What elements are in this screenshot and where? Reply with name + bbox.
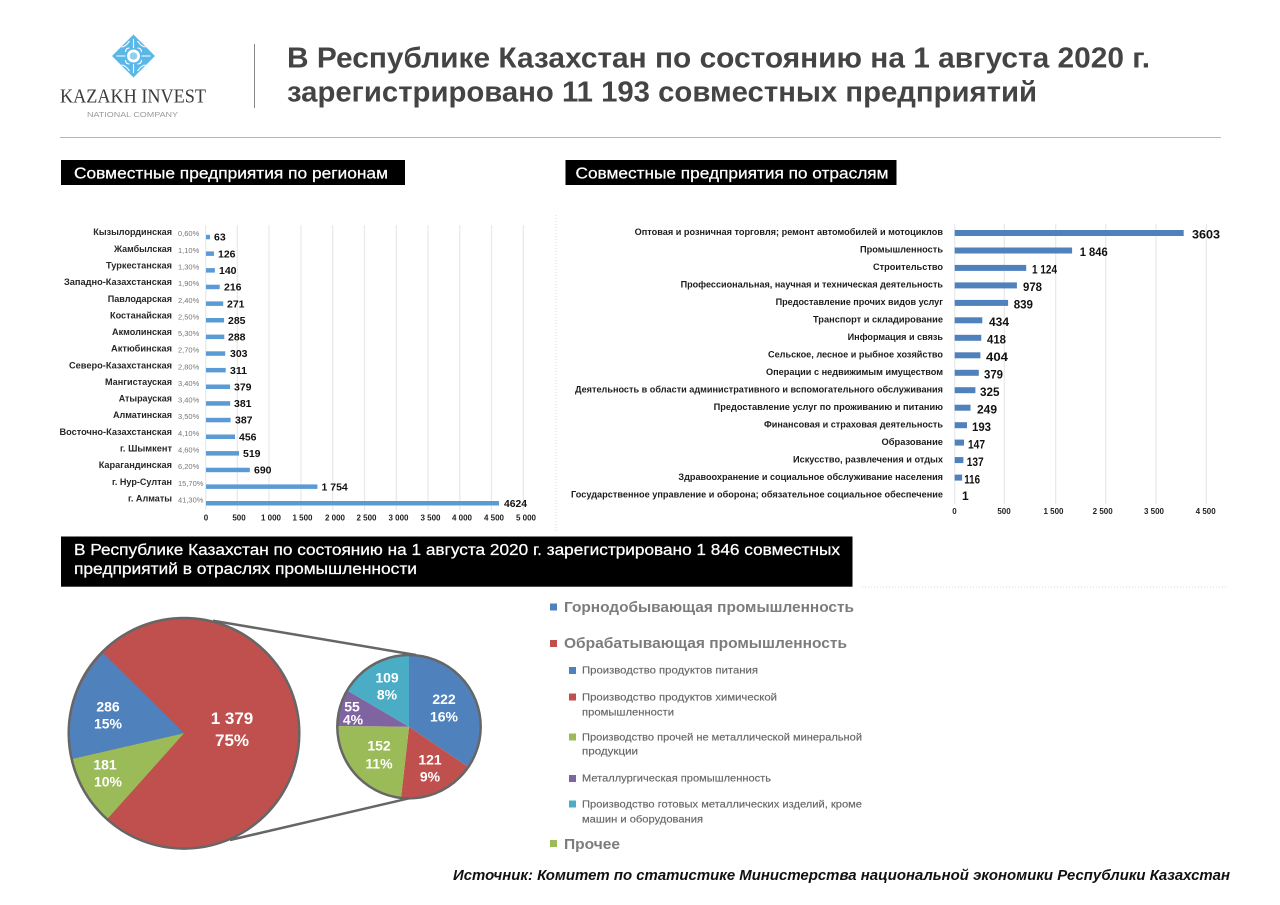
logo: Kazakh Invest (60, 34, 206, 119)
heading: industry joint ventures (61, 536, 852, 587)
bar chart: regions: Западно-Казахстанская (64, 277, 172, 288)
title: зарегистрировано 11 193 совместных предприятий (287, 77, 1037, 109)
bar chart: regions: 63 (214, 232, 226, 244)
bar chart: regions: 690 (254, 465, 272, 477)
bar chart: regions: 500 (232, 514, 246, 523)
bar chart: regions: 1 000 (261, 514, 282, 523)
legend: Производство прочей не металлической минеральной (582, 732, 862, 744)
bar chart: industries: Сельское, лесное и рыбное хозяйство (768, 349, 943, 360)
bar chart: industries: Информация и связь (848, 332, 943, 343)
bar chart: regions: 3,40% (178, 379, 200, 388)
bar chart: regions: 5 000 (516, 514, 537, 523)
bar chart: regions: Восточно-Казахстанская (60, 427, 172, 438)
pie chart: industry overall: 181 (93, 757, 117, 773)
bar chart: industries: 193 (972, 420, 991, 434)
bar chart: industries: 3 500 (1144, 507, 1165, 516)
legend (550, 599, 862, 853)
source note: Источник: Комитет по статистике Министерства национальной экономики Республики Казахстан (453, 867, 1230, 884)
bar chart: regions: 2,50% (178, 312, 200, 321)
bar chart: regions: 15,70% (178, 479, 204, 488)
pie chart: manufacturing breakdown: 152 (367, 738, 391, 754)
bar chart: industries: Здравоохранение и социальное обслуживание населения (678, 472, 943, 483)
bar chart: regions: 1,90% (178, 279, 200, 288)
heading: by industries: Совместные предприятия по отраслям (576, 166, 888, 183)
bar chart: industries: Операции с недвижимым имуществом (766, 367, 943, 378)
bar chart: regions: Туркестанская (106, 260, 172, 271)
bar chart: regions: 4,60% (178, 445, 200, 454)
bar chart: regions: 1,30% (178, 262, 200, 271)
bar chart: regions: 379 (234, 381, 252, 393)
bar chart: industries: 839 (1014, 298, 1033, 312)
bar chart: industries: 0 (952, 507, 957, 516)
bar chart: industries: 404 (986, 350, 1008, 364)
icon: blue diamond ornament (112, 34, 155, 78)
bar chart: regions: 2,40% (178, 296, 200, 305)
pie chart: industry overall: 286 (96, 699, 120, 715)
bar chart: industries: 1 (962, 489, 969, 503)
bar chart: regions: 3,50% (178, 412, 200, 421)
bar chart: regions: Жамбылская (113, 244, 172, 255)
pie chart: manufacturing breakdown (337, 655, 481, 798)
bar chart: regions: Актюбинская (111, 344, 172, 355)
bar chart: industries: Государственное управление и оборона; обязательное социальное обеспечение (571, 489, 943, 500)
bar chart: regions (60, 225, 537, 523)
title (287, 43, 1150, 109)
bar chart: regions: 1 500 (292, 514, 313, 523)
legend: Производство готовых металлических изделий, кроме (582, 799, 862, 811)
bar chart: regions: 2 500 (356, 514, 377, 523)
bar chart: industries: Строительство (873, 262, 943, 273)
bar chart: industries: 1 846 (1080, 245, 1108, 259)
bar chart: industries: 2 500 (1093, 507, 1113, 516)
bar chart: regions: Карагандинская (99, 460, 172, 471)
bar chart: regions: 2 000 (325, 514, 346, 523)
bar chart: regions: 140 (219, 265, 237, 277)
legend: Производство продуктов химической (582, 692, 777, 704)
heading: by industries (566, 160, 896, 185)
bar chart: industries: 3603 (1192, 228, 1220, 242)
bar chart: industries: 1 500 (1043, 507, 1064, 516)
bar chart: regions: 311 (230, 365, 247, 377)
title: В Республике Казахстан по состоянию на 1 августа 2020 г. (287, 43, 1150, 75)
pie connector lines (213, 621, 416, 840)
logo wordmark: KAZAKH INVEST (60, 86, 206, 108)
bar chart: industries: 978 (1023, 280, 1042, 294)
bar chart: regions: 285 (228, 315, 246, 327)
bar chart: regions: 4624 (504, 498, 527, 510)
bar chart: regions: 303 (230, 348, 248, 360)
bar chart: regions: 456 (239, 431, 257, 443)
bar chart: regions: 0 (204, 514, 209, 523)
bar chart: regions: г. Шымкент (120, 443, 172, 454)
bar chart: regions: 4,10% (178, 429, 200, 438)
legend: Горнодобывающая промышленность (564, 599, 854, 616)
pie chart: manufacturing breakdown: 222 (432, 691, 456, 707)
bar chart: regions: г. Алматы (128, 493, 172, 504)
bar chart: regions: Мангистауская (105, 377, 172, 388)
bar chart: industries: Транспорт и складирование (813, 314, 943, 325)
legend: промышленности (582, 707, 674, 719)
bar chart: regions: 1,10% (178, 246, 200, 255)
bar chart: industries: Предоставление услуг по проживанию и питанию (714, 402, 943, 413)
bar chart: regions: Атырауская (119, 394, 172, 405)
legend: Металлургическая промышленность (582, 773, 772, 785)
pie chart: industry overall: 1 379 (211, 709, 253, 728)
bar chart: regions: Костанайская (110, 310, 172, 321)
bar chart: regions: 288 (228, 331, 246, 343)
bar chart: regions: 3,40% (178, 396, 200, 405)
bar chart: regions: Алматинская (113, 410, 172, 421)
pie chart: manufacturing breakdown: 16% (430, 709, 459, 725)
bar chart: industries: 249 (977, 402, 997, 416)
pie chart: manufacturing breakdown: 9% (420, 769, 441, 785)
bar chart: industries: 1 124 (1032, 263, 1057, 277)
bar chart: regions: Северо-Казахстанская (69, 360, 172, 371)
bar chart: regions: 2,70% (178, 346, 200, 355)
bar chart: regions: 271 (227, 298, 245, 310)
bar chart: industries: 434 (989, 315, 1009, 329)
bar chart: regions: 387 (235, 415, 253, 427)
bar chart: industries: Оптовая и розничная торговля; ремонт автомобилей и мотоциклов (635, 227, 943, 238)
logo tagline: NATIONAL COMPANY (87, 112, 178, 119)
bar chart: regions: 5,30% (178, 329, 200, 338)
legend: Обрабатывающая промышленность (564, 635, 847, 652)
bar chart: industries: Искусство, развлечения и отдых (793, 454, 944, 465)
bar chart: industries: 418 (987, 332, 1006, 346)
pie chart: manufacturing breakdown: 109 (375, 670, 399, 686)
bar chart: regions: Акмолинская (112, 327, 172, 338)
bar chart: regions: 4 000 (452, 514, 473, 523)
bar chart: regions: Кызылординская (93, 227, 172, 238)
bar chart: industries: Деятельность в области административного и вспомогательного обслуживания (575, 384, 943, 395)
bar chart: regions: Павлодарская (108, 294, 172, 305)
bar chart: industries: 137 (967, 455, 984, 469)
bar chart: industries: Образование (882, 437, 943, 448)
heading: by regions (61, 160, 405, 185)
bar chart: industries (571, 224, 1220, 516)
pie chart: manufacturing breakdown: 4% (343, 712, 364, 728)
bar chart: regions: 3 500 (420, 514, 441, 523)
bar chart: regions: 2,80% (178, 362, 200, 371)
bar chart: industries: Профессиональная, научная и техническая деятельность (681, 280, 943, 291)
legend: продукции (582, 746, 638, 758)
pie chart: manufacturing breakdown: 8% (377, 687, 398, 703)
bar chart: industries: 4 500 (1196, 507, 1216, 516)
legend: Производство продуктов питания (582, 665, 758, 677)
legend: машин и оборудования (582, 814, 703, 826)
bar chart: regions: 1 754 (322, 481, 348, 493)
pie chart: manufacturing breakdown: 11% (365, 756, 393, 772)
bar chart: industries: 325 (980, 385, 1000, 399)
bar chart: regions: 519 (243, 448, 261, 460)
heading: industry joint ventures: В Республике Казахстан по состоянию на 1 августа 2020 г. зарегистрировано 1 846 совместных (74, 542, 840, 559)
bar chart: regions: 4 500 (484, 514, 505, 523)
bar chart: regions: 216 (224, 282, 242, 294)
pie chart: industry overall: 10% (94, 774, 123, 790)
bar chart: industries: 147 (968, 437, 985, 451)
bar chart: regions: 6,20% (178, 462, 200, 471)
bar chart: regions: 381 (234, 398, 252, 410)
bar chart: industries: Предоставление прочих видов услуг (776, 297, 943, 308)
bar chart: industries: 500 (997, 507, 1011, 516)
pie chart: industry overall: 75% (215, 731, 249, 750)
pie chart: manufacturing breakdown: 121 (418, 751, 442, 767)
pie chart: industry overall (69, 618, 299, 849)
bar chart: regions: 3 000 (388, 514, 409, 523)
bar chart: industries: Промышленность (860, 245, 943, 256)
bar chart: industries: 379 (984, 367, 1003, 381)
bar chart: industries: Финансовая и страховая деятельность (764, 419, 943, 430)
legend: Прочее (564, 836, 620, 853)
bar chart: regions: 126 (218, 248, 236, 260)
logo divider (254, 44, 256, 108)
bar chart: industries: 116 (964, 472, 980, 486)
bar chart: regions: 0,60% (178, 229, 200, 238)
bar chart: regions: г. Нур-Султан (112, 477, 172, 488)
pie chart: manufacturing breakdown: 55 (344, 699, 360, 715)
heading: by regions: Совместные предприятия по регионам (74, 166, 388, 183)
heading: industry joint ventures: предприятий в отраслях промышленности (74, 561, 417, 578)
bar chart: regions: 41,30% (178, 495, 204, 504)
pie chart: industry overall: 15% (94, 716, 123, 732)
